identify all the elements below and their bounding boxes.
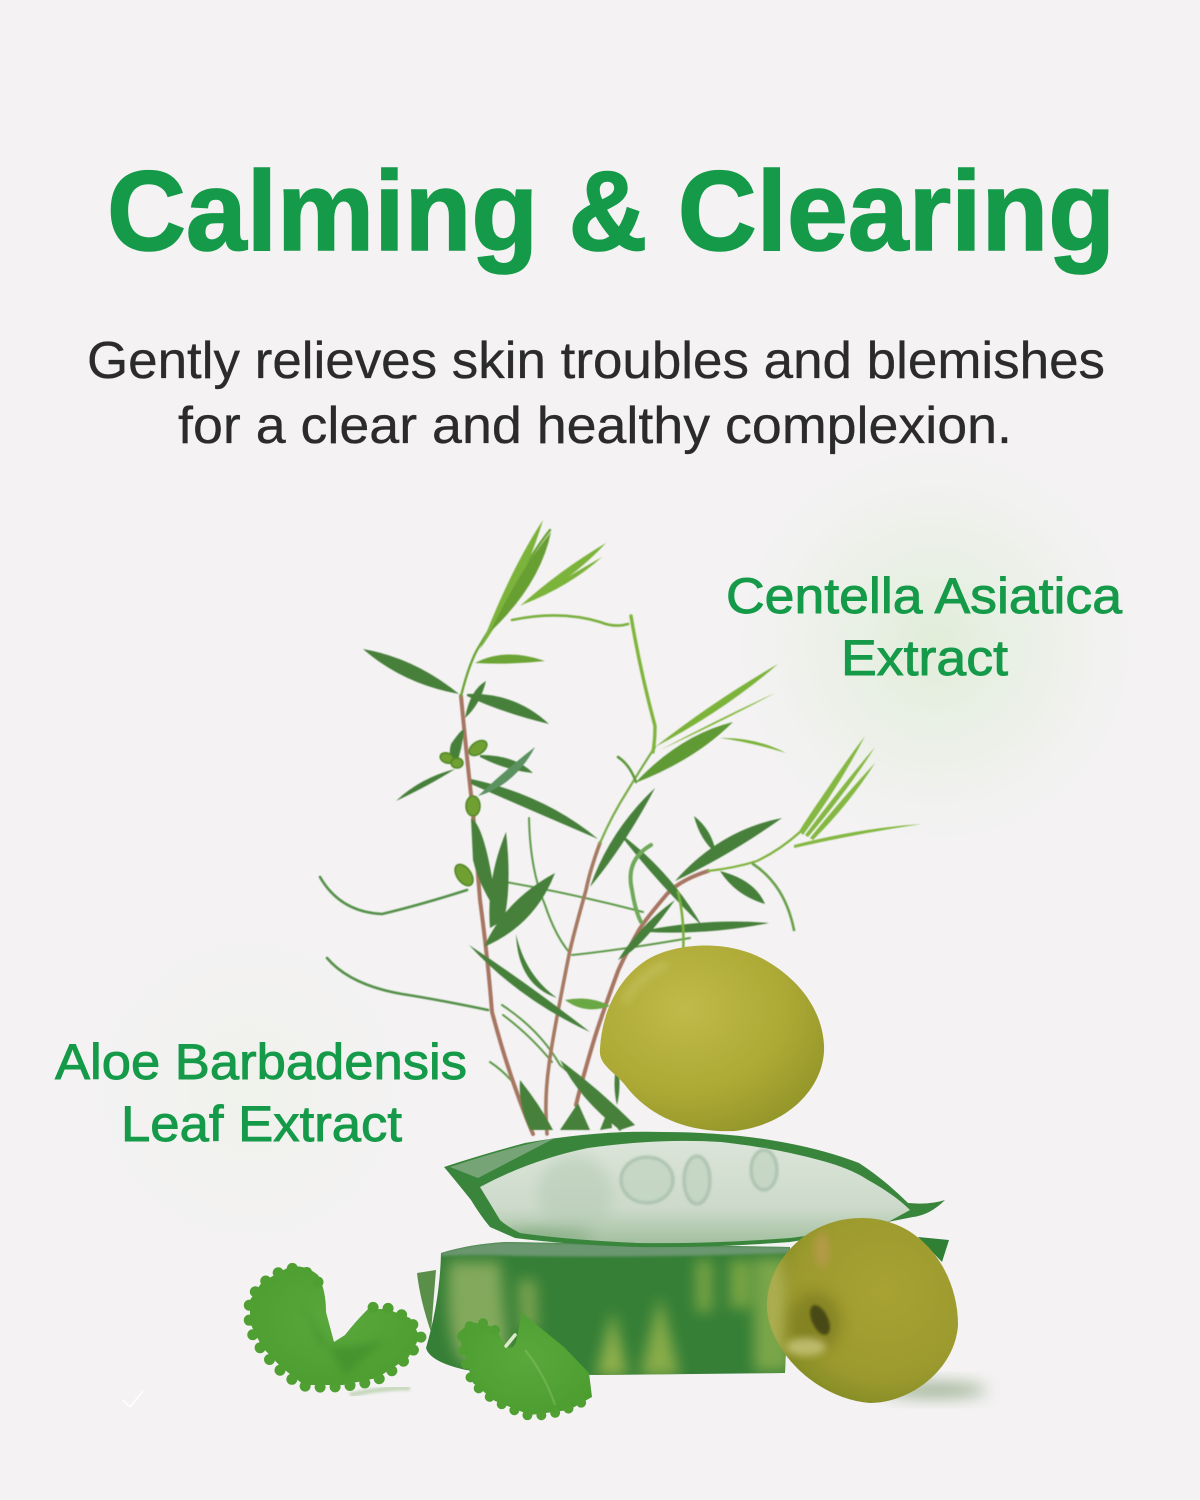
- subtitle: [87, 332, 1105, 455]
- label: centella asiatica extract: [726, 568, 1122, 686]
- illustration: centella leaf pair: [249, 1266, 421, 1395]
- subtitle: Gently relieves skin troubles and blemishes: [87, 332, 1105, 390]
- label: centella asiatica extract: Extract: [841, 630, 1008, 686]
- label: centella asiatica extract: Centella Asiatica: [726, 568, 1122, 624]
- illustration: aloe slice, upper wedge: [444, 1132, 945, 1247]
- dark mature leaves: [363, 649, 782, 1130]
- label: aloe barbadensis leaf extract: Leaf Extract: [121, 1096, 402, 1152]
- gel bubbles: [621, 1150, 777, 1204]
- label: aloe barbadensis leaf extract: Aloe Barbadensis: [55, 1034, 467, 1090]
- glow: centella label background: [710, 420, 1160, 870]
- illustration: olive, front with dimple: [758, 1218, 987, 1403]
- teal mid leaves: [478, 747, 535, 796]
- illustration: olive on top of aloe: [600, 946, 824, 1131]
- subtitle: for a clear and healthy complexion.: [178, 397, 1012, 455]
- illustration: aloe slice, lower block: [417, 1237, 949, 1376]
- bright young leaves: [475, 520, 922, 1009]
- illustration: botanical sprigs: [320, 520, 922, 1134]
- label: aloe barbadensis leaf extract: [55, 1034, 467, 1152]
- buds: [439, 737, 490, 889]
- curved long leaves: [320, 615, 794, 1010]
- illustration: centella leaf, front: [458, 1313, 592, 1416]
- title: Calming & Clearing: [107, 148, 1115, 274]
- glow: aloe label background: [20, 860, 480, 1320]
- thin background leaves: [490, 818, 690, 1130]
- stems: [461, 530, 850, 1134]
- icon: small white check mark: [123, 1391, 143, 1407]
